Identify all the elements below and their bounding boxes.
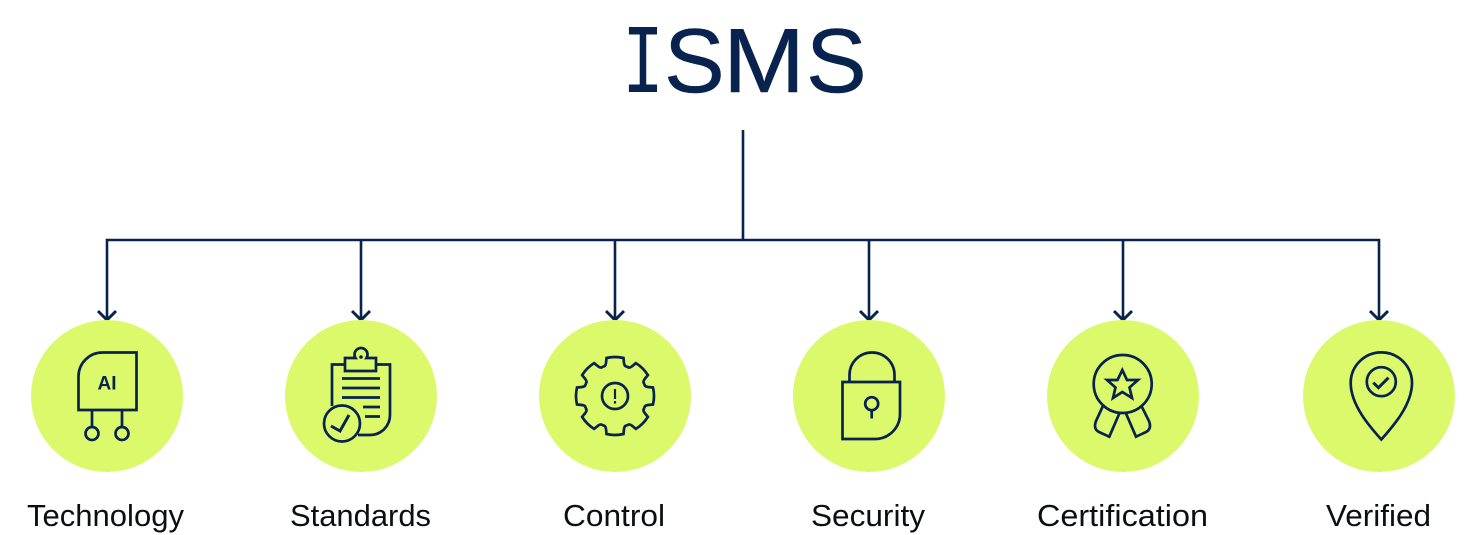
node: Technology [27, 320, 184, 533]
icon: clipboard with check [324, 348, 390, 442]
node: Certification [1037, 320, 1208, 533]
title: M [723, 11, 805, 112]
node: Standards [285, 320, 437, 533]
node: Verified [1303, 320, 1455, 533]
node: Control [539, 320, 691, 533]
icon: AI chip: AI [98, 374, 116, 394]
label: Control: Control [563, 498, 665, 533]
label: Security: Security [811, 498, 926, 533]
title: S [664, 11, 725, 112]
label: Verified: Verified [1326, 498, 1431, 533]
icon: gear with alert [576, 357, 654, 435]
connector tree with arrows [98, 130, 1388, 320]
title [622, 11, 867, 122]
icon: location pin with check [1351, 352, 1412, 440]
title: I [622, 11, 664, 122]
node: Security [793, 320, 945, 533]
icon: padlock [842, 353, 900, 439]
title: S [806, 11, 867, 112]
label: Standards: Standards [290, 498, 431, 533]
label: Certification: Certification [1037, 498, 1208, 533]
icon: award ribbon [1094, 355, 1152, 437]
icon: AI chip [78, 352, 136, 440]
label: Technology: Technology [27, 498, 184, 533]
